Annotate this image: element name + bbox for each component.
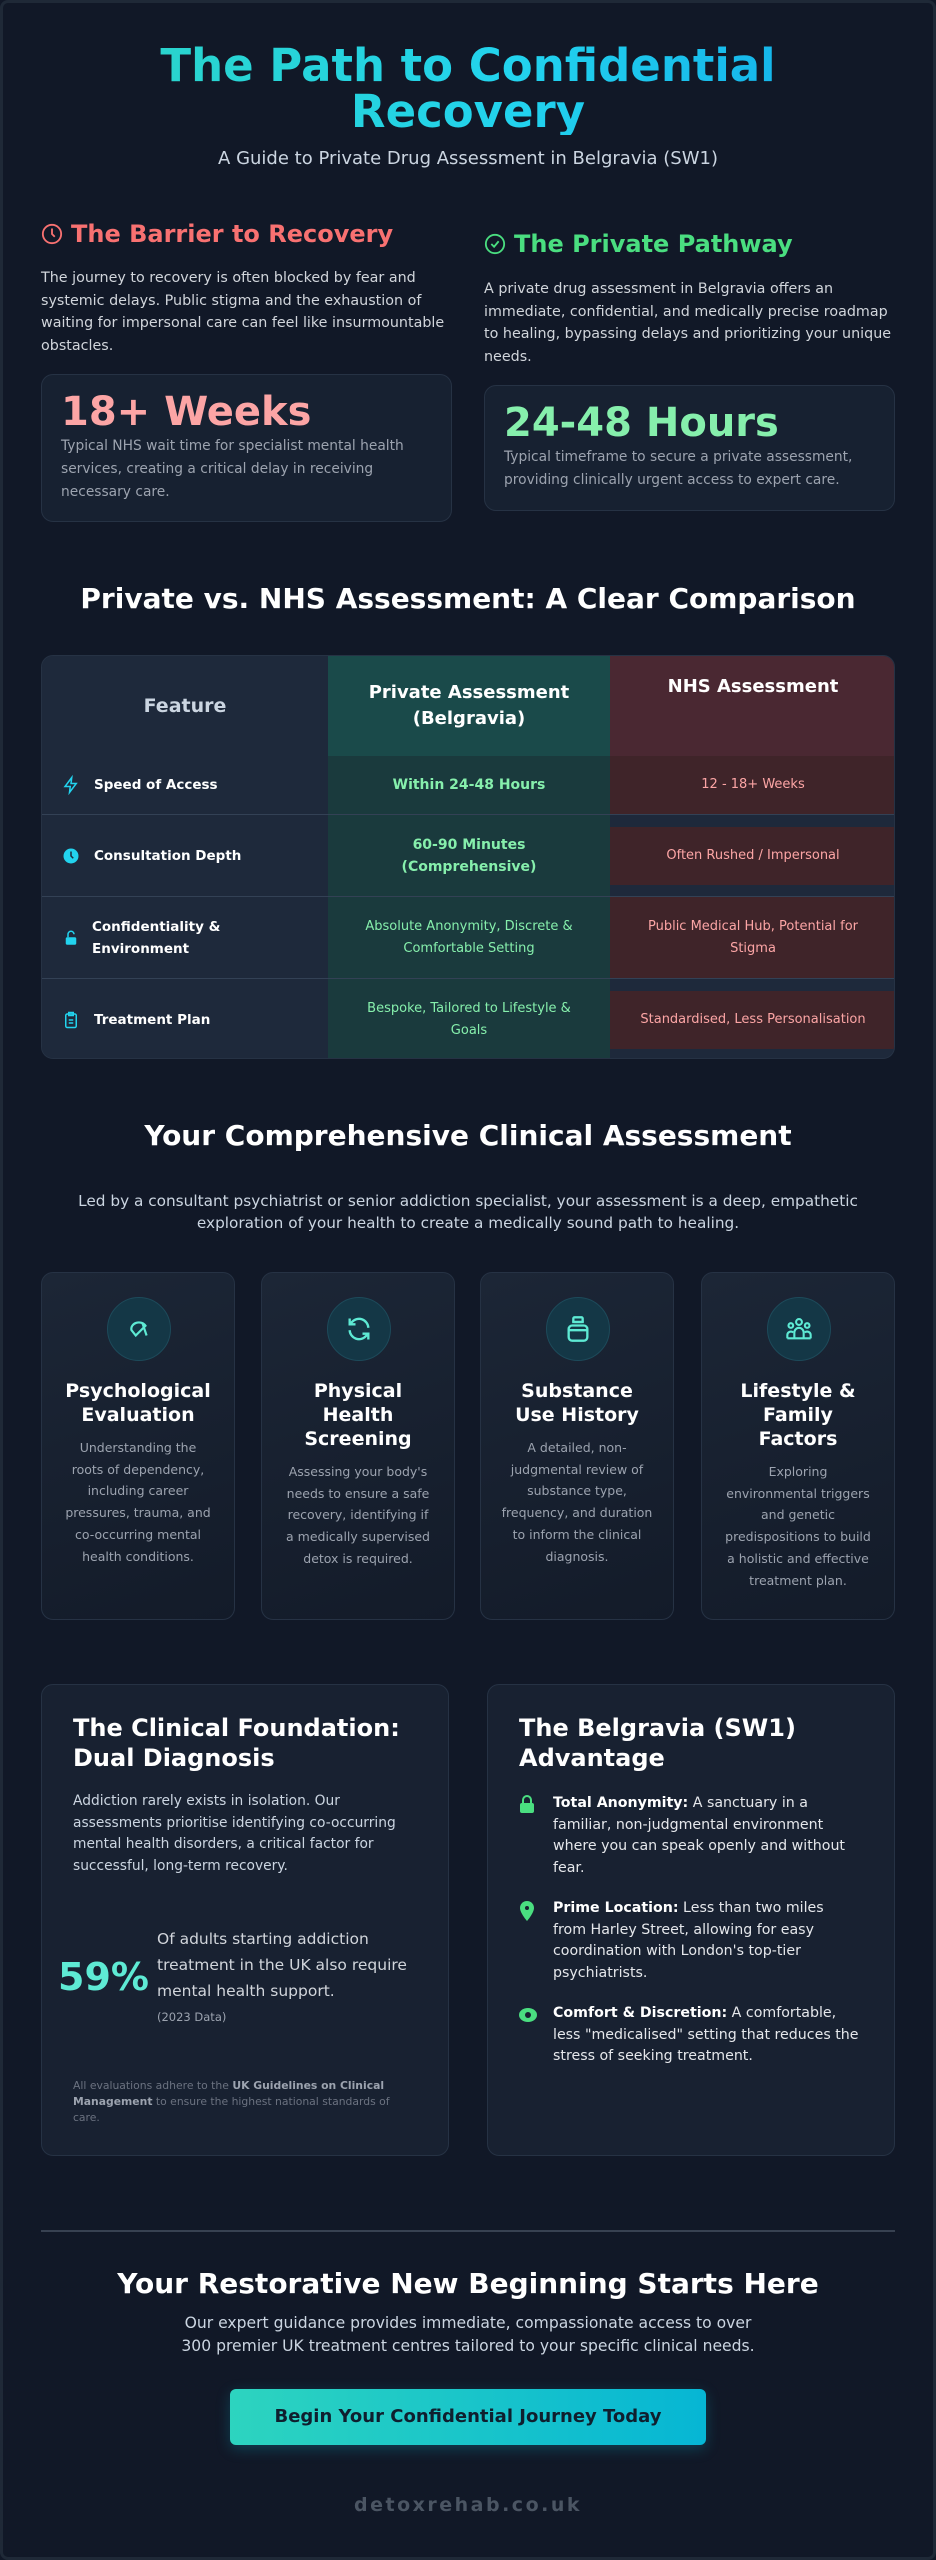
card: physical: Assessing your body's needs to ensure a safe recovery, identifying if a medically supervised detox is required. (286, 1464, 430, 1566)
card: psychological: Psychological (65, 1380, 211, 1402)
card: physical: Physical (314, 1380, 402, 1402)
icon: jar (546, 1297, 610, 1361)
footnote: All evaluations adhere to the UK Guidelines on Clinical Management to ensure the highest national standards of care. (73, 2079, 390, 2124)
row: treatment: Bespoke, Tailored to Lifestyle & Goals (367, 1000, 571, 1038)
heading: comparison: Private vs. NHS Assessment: A Clear Comparison (80, 582, 856, 615)
row: treatment: Standardised, Less Personalisation (640, 1012, 866, 1026)
row: consultation (42, 814, 896, 896)
heading: belgravia: Advantage (519, 1744, 665, 1772)
card: physical (261, 1272, 455, 1620)
card: lifestyle: Exploring environmental triggers and genetic predispositions to build a holistic and effective treatment plan. (725, 1464, 871, 1588)
row: confidentiality: Absolute Anonymity, Discrete & Comfortable Setting (365, 918, 573, 956)
row: consultation: (Comprehensive) (402, 858, 536, 874)
card: substance: Use History (515, 1404, 639, 1426)
item: anonymity: Total Anonymity: A sanctuary in a familiar, non-judgmental environment where you can speak openly and without fear. (553, 1795, 845, 1876)
row: treatment: Treatment Plan (94, 1012, 210, 1028)
card: lifestyle: Lifestyle & (740, 1380, 856, 1402)
card: lifestyle (701, 1272, 895, 1620)
cta text: 300 premier UK treatment centres tailored to your specific clinical needs. (181, 2336, 755, 2354)
text: stat description: (2023 Data) (157, 2010, 226, 2024)
row: consultation: Often Rushed / Impersonal (666, 848, 840, 862)
cta text: Our expert guidance provides immediate, compassionate access to over (185, 2314, 751, 2332)
text: barrier: The journey to recovery is often blocked by fear and systemic delays. Public stigma and the exhaustion of waiting for impersonal care can feel like insurmountable obstacles. (41, 270, 444, 354)
card: physical: Screening (304, 1428, 412, 1450)
card: substance: A detailed, non-judgmental review of substance type, frequency, and duration to inform the clinical diagnosis. (502, 1440, 652, 1564)
icon: family (767, 1297, 831, 1361)
cta button (230, 2389, 706, 2445)
row: speed (64, 756, 894, 814)
stat box: 24-48 hours: Typical timeframe to secure a private assessment, providing clinically urgent access to expert care. (504, 449, 852, 488)
row: confidentiality: Confidentiality & (92, 918, 220, 934)
row: consultation: Consultation Depth (94, 848, 241, 864)
title: The Path to Confidential (160, 39, 776, 92)
panel: private pathway (484, 230, 895, 511)
table header: Feature (144, 695, 226, 717)
heading: private: The Private Pathway (514, 230, 793, 258)
heading: belgravia (519, 1714, 796, 1772)
cta heading: Your Restorative New Beginning Starts Here (117, 2267, 819, 2300)
heading: barrier: The Barrier to Recovery (71, 220, 393, 248)
comparison table (41, 655, 895, 1059)
stat box: 24-48 hours: 24-48 Hours (504, 400, 779, 446)
stat box: 18+ weeks: Typical NHS wait time for specialist mental health services, creating a critical delay in receiving necessary care. (61, 438, 404, 500)
card: psychological: Understanding the roots of dependency, including career pressures, trauma, and co-occurring mental health conditions. (65, 1440, 211, 1564)
row: speed: Speed of Access (94, 777, 218, 793)
intro text: Led by a consultant psychiatrist or senior addiction specialist, your assessment is a deep, empathetic exploration of your health to create a medically sound path to healing. (78, 1192, 858, 1232)
row: treatment (42, 978, 896, 1060)
title (0, 43, 936, 135)
subtitle: A Guide to Private Drug Assessment in Belgravia (SW1) (218, 148, 718, 169)
card: psychological (41, 1272, 235, 1620)
heading: belgravia: The Belgravia (SW1) (519, 1714, 796, 1742)
footer: detoxrehab.co.uk (354, 2494, 582, 2516)
card: lifestyle: Factors (759, 1428, 837, 1450)
cta button: Begin Your Confidential Journey Today (274, 2406, 662, 2427)
panel: belgravia advantage (487, 1684, 895, 2156)
stat: 59%: 59% (58, 1955, 149, 1999)
card: lifestyle: Family (763, 1404, 833, 1426)
item: location: Prime Location: Less than two miles from Harley Street, allowing for easy coordination with London's top-tier psychiatrists. (553, 1900, 824, 1981)
heading: dual diagnosis: The Clinical Foundation: (73, 1714, 400, 1742)
row: confidentiality (42, 896, 896, 978)
row: speed: Within 24-48 Hours (393, 777, 545, 793)
card: physical: Health (323, 1404, 393, 1426)
row: consultation: 60-90 Minutes (413, 836, 525, 852)
card: substance (480, 1272, 674, 1620)
cta text (181, 2314, 755, 2354)
stat box: 24-48 hours (484, 385, 895, 511)
table header: Private Assessment (369, 682, 569, 703)
title: Recovery (351, 85, 585, 138)
text: private: A private drug assessment in Belgravia offers an immediate, confidential, and medically precise roadmap to healing, bypassing delays and prioritizing your unique needs. (484, 281, 891, 364)
text: dual diagnosis: Addiction rarely exists in isolation. Our assessments prioritise identifying co-occurring mental health disorders, a critical factor for successful, long-term recovery. (73, 1793, 396, 1874)
icon: refresh (327, 1297, 391, 1361)
heading: dual diagnosis: Dual Diagnosis (73, 1744, 275, 1772)
table header: NHS Assessment (668, 676, 838, 697)
card: psychological: Evaluation (81, 1404, 195, 1426)
heading: clinical assessment: Your Comprehensive Clinical Assessment (144, 1119, 792, 1152)
item: comfort: Comfort & Discretion: A comfortable, less "medicalised" setting that reduces the stress of seeking treatment. (553, 2005, 859, 2064)
row: confidentiality: Public Medical Hub, Potential for Stigma (648, 918, 858, 956)
panel: barrier (40, 220, 452, 522)
text: stat description: Of adults starting addiction treatment in the UK also require mental health support. (157, 1930, 407, 2000)
row: confidentiality: Environment (92, 940, 189, 956)
row: speed: 12 - 18+ Weeks (701, 777, 805, 792)
icon: mind (107, 1297, 171, 1361)
stat box: 18+ weeks (41, 374, 452, 522)
card: substance: Substance (521, 1380, 633, 1402)
stat box: 18+ weeks: 18+ Weeks (61, 389, 311, 435)
table header (144, 656, 894, 756)
panel: dual diagnosis (41, 1684, 449, 2156)
heading: dual diagnosis (73, 1714, 400, 1772)
table header: (Belgravia) (413, 708, 525, 729)
